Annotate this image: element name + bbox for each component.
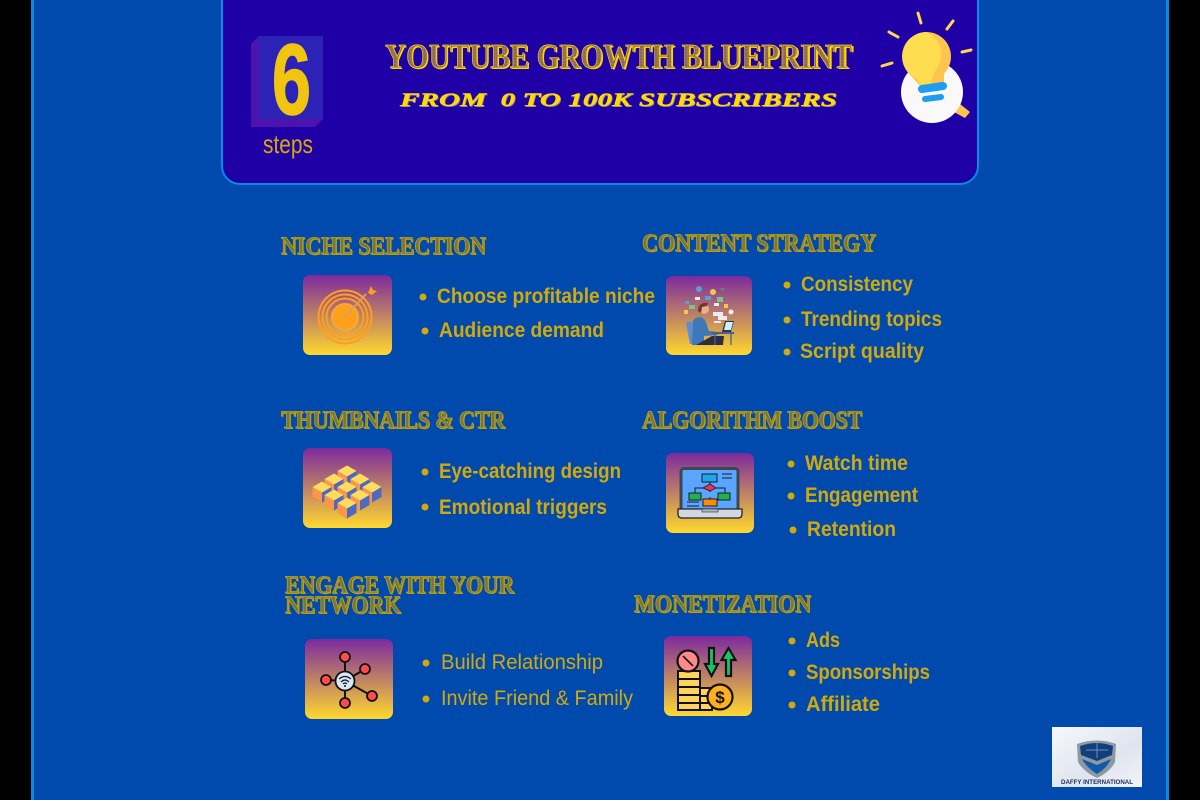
heading: engage with your network: NETWORK — [286, 593, 402, 620]
bullet list: Affiliate — [806, 693, 880, 716]
bullet list: Audience demand — [439, 319, 604, 342]
icon: network hub — [305, 639, 393, 719]
icon: six steps badge: steps — [263, 129, 313, 159]
bullet list: Retention — [807, 518, 896, 541]
bullet list: Script quality — [800, 340, 924, 363]
heading: engage with your network: ENGAGE WITH YOUR — [285, 572, 515, 599]
bullet list — [422, 460, 621, 519]
panel: thumbnails and ctr — [281, 407, 621, 528]
subtitle: FROM 0 TO 100K SUBSCRIBERS — [398, 90, 837, 111]
bullet list: Build Relationship — [441, 651, 603, 674]
icon: six steps badge: 6 — [272, 24, 311, 136]
icon: light bulb and magnifier — [882, 13, 971, 123]
heading: niche selection: NICHE SELECTION — [281, 233, 486, 260]
icon: coins and arrows: $ — [715, 688, 725, 707]
icon: coins and arrows — [664, 636, 752, 716]
heading: monetization: MONETIZATION — [635, 592, 812, 619]
icon: target — [303, 275, 392, 355]
bullet list: Trending topics — [801, 308, 942, 331]
panel: monetization — [634, 591, 930, 716]
logo: daffy international — [1052, 727, 1142, 787]
panel: content strategy — [642, 230, 942, 363]
heading: thumbnails and ctr: THUMBNAILS & CTR — [282, 408, 507, 435]
bullet list: Engagement — [805, 484, 918, 507]
bullet list — [422, 651, 633, 710]
bullet list — [420, 285, 655, 342]
bullet list: Ads — [806, 629, 840, 652]
heading: engage with your network — [285, 572, 516, 620]
title: YOUTUBE GROWTH BLUEPRINT — [386, 38, 854, 77]
heading: content strategy: CONTENT STRATEGY — [642, 230, 876, 257]
icon: laptop flowchart — [666, 453, 754, 533]
bullet list — [784, 273, 942, 363]
heading: monetization: MONETIZATION — [634, 591, 811, 618]
icon: person at laptop — [666, 276, 752, 355]
heading: niche selection: NICHE SELECTION — [282, 234, 487, 261]
panel: niche selection — [281, 233, 655, 355]
heading: algorithm boost: ALGORITHM BOOST — [642, 407, 862, 434]
header panel — [222, 0, 978, 184]
logo: daffy international: DAFFY INTERNATIONAL — [1061, 780, 1133, 786]
bullet list: Emotional triggers — [439, 496, 607, 519]
panel: engage with your network — [285, 572, 633, 719]
panel: algorithm boost — [642, 407, 918, 541]
bullet list: Choose profitable niche — [437, 285, 655, 308]
icon: isometric cubes — [303, 448, 392, 528]
bullet list — [788, 629, 930, 716]
heading: content strategy: CONTENT STRATEGY — [643, 231, 877, 258]
heading: algorithm boost: ALGORITHM BOOST — [643, 408, 863, 435]
heading: engage with your network: NETWORK — [285, 592, 401, 619]
bullet list: Sponsorships — [806, 661, 930, 684]
heading: thumbnails and ctr: THUMBNAILS & CTR — [281, 407, 506, 434]
subtitle: FROM 0 TO 100K SUBSCRIBERS — [399, 91, 838, 112]
bullet list: Consistency — [801, 273, 913, 296]
bullet list: Eye-catching design — [439, 460, 621, 483]
bullet list: Watch time — [805, 452, 908, 475]
bullet list — [788, 452, 918, 541]
bullet list: Invite Friend & Family — [441, 687, 633, 710]
icon: six steps badge — [251, 24, 323, 159]
title: YOUTUBE GROWTH BLUEPRINT — [385, 37, 852, 76]
heading: engage with your network: ENGAGE WITH YOUR — [286, 573, 516, 600]
subtitle — [398, 90, 838, 112]
